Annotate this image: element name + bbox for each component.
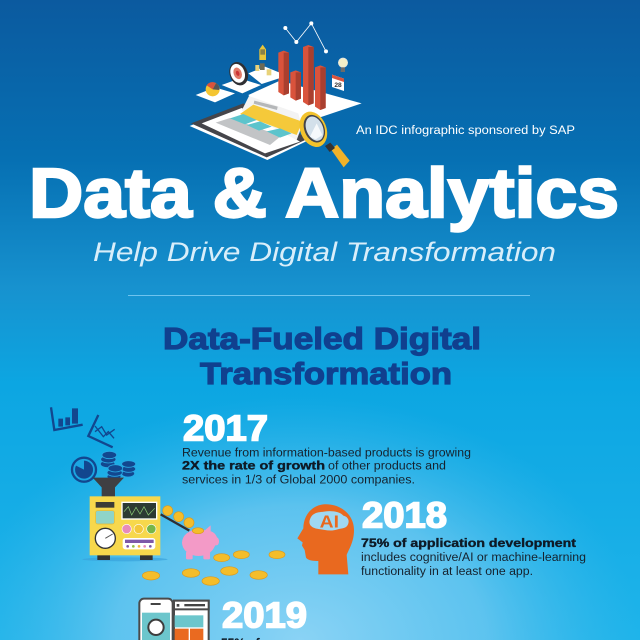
target icon bbox=[226, 59, 251, 88]
document page bbox=[216, 96, 302, 145]
icon: AI head: AI bbox=[320, 512, 339, 532]
piggy bank bbox=[182, 525, 219, 559]
2017 block: Revenue from information-based products is growing bbox=[182, 448, 471, 460]
2017 block: services in 1/3 of Global 2000 companies. bbox=[182, 474, 415, 486]
bulb icon bbox=[338, 58, 348, 72]
2018 block bbox=[361, 494, 586, 578]
icon: bar chart bbox=[51, 407, 83, 430]
section heading bbox=[163, 321, 481, 391]
calendar icon: 28 bbox=[334, 82, 342, 89]
2019 block: 2019 bbox=[222, 594, 307, 636]
bar chart bbox=[278, 45, 326, 110]
tablet bbox=[190, 103, 309, 160]
chute bbox=[161, 514, 189, 531]
2018 block: includes cognitive/AI or machine-learning bbox=[361, 552, 586, 564]
icon: coin stacks bbox=[100, 451, 136, 480]
machine bbox=[82, 496, 168, 561]
2017 block: of other products and bbox=[328, 460, 446, 472]
icon: AI head bbox=[297, 504, 354, 574]
line chart bbox=[283, 21, 328, 53]
2017 block: 2X the rate of growth bbox=[182, 460, 325, 472]
subtitle: Help Drive Digital Transformation bbox=[93, 237, 556, 267]
pie icon bbox=[206, 82, 220, 96]
funnel bbox=[93, 478, 124, 497]
icons: charts and coins into machine bbox=[51, 407, 285, 585]
icon: phone and browser bbox=[139, 599, 209, 640]
section heading: Data-Fueled Digital bbox=[163, 321, 481, 356]
small tiles bbox=[196, 67, 279, 102]
title: Data & Analytics bbox=[29, 154, 619, 232]
sponsor note: An IDC infographic sponsored by SAP bbox=[356, 125, 575, 137]
2018 block: 2018 bbox=[362, 494, 447, 536]
rocket icon bbox=[255, 45, 271, 75]
section heading: Transformation bbox=[200, 356, 452, 391]
magnifying glass bbox=[294, 107, 350, 167]
coins bbox=[142, 506, 285, 585]
icon: pie circle bbox=[72, 458, 96, 482]
2018 block: 75% of application development bbox=[361, 538, 576, 550]
2018 block: functionality in at least one app. bbox=[361, 566, 533, 578]
icon: analytics report illustration bbox=[190, 21, 362, 167]
white plane bbox=[248, 81, 362, 125]
2017 block bbox=[182, 408, 471, 486]
2017 block: 2017 bbox=[183, 408, 268, 448]
icon: line chart bbox=[88, 415, 115, 447]
calendar icon bbox=[332, 75, 344, 91]
